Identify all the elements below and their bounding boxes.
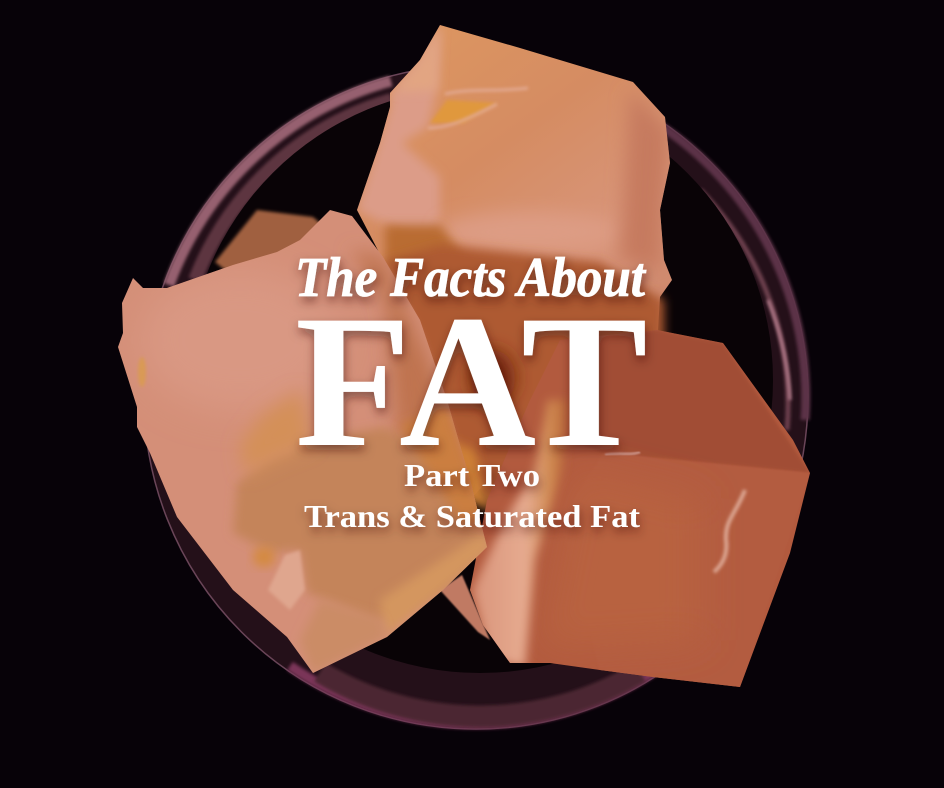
- subtitle: Trans &amp; Saturated Fat: Trans & Saturated Fat: [304, 498, 640, 534]
- butter: small lower piece: [440, 575, 490, 640]
- top block: pale lower band: [440, 212, 620, 252]
- right block: highlight: [714, 490, 745, 572]
- bowl: right rim: [655, 122, 806, 420]
- left block: pale crumb: [268, 550, 305, 610]
- bowl: bottom rim: [290, 666, 662, 724]
- right block: light stripe: [472, 400, 570, 668]
- left block: yellow dab: [138, 357, 146, 387]
- left block: tan lower face: [233, 427, 487, 622]
- butter: centre shadow region: [383, 245, 664, 510]
- butter: back piece: [215, 210, 340, 270]
- subtitle: Part Two: Part Two: [404, 457, 540, 493]
- butter: top block: [357, 25, 672, 495]
- title: The Facts About: The Facts About: [295, 247, 646, 309]
- title: FAT: FAT: [295, 277, 648, 487]
- left block: orange smear: [240, 390, 312, 475]
- right block: top face: [570, 330, 810, 473]
- butter bowl infographic: [118, 25, 812, 732]
- bowl: [144, 65, 808, 729]
- top block: yellow accent: [430, 100, 497, 123]
- right block: front face: [599, 474, 810, 687]
- butter: right block: [470, 330, 810, 687]
- butter: left block: [110, 200, 500, 680]
- bowl: top-left rim: [169, 81, 391, 285]
- top block: pink face: [357, 25, 440, 243]
